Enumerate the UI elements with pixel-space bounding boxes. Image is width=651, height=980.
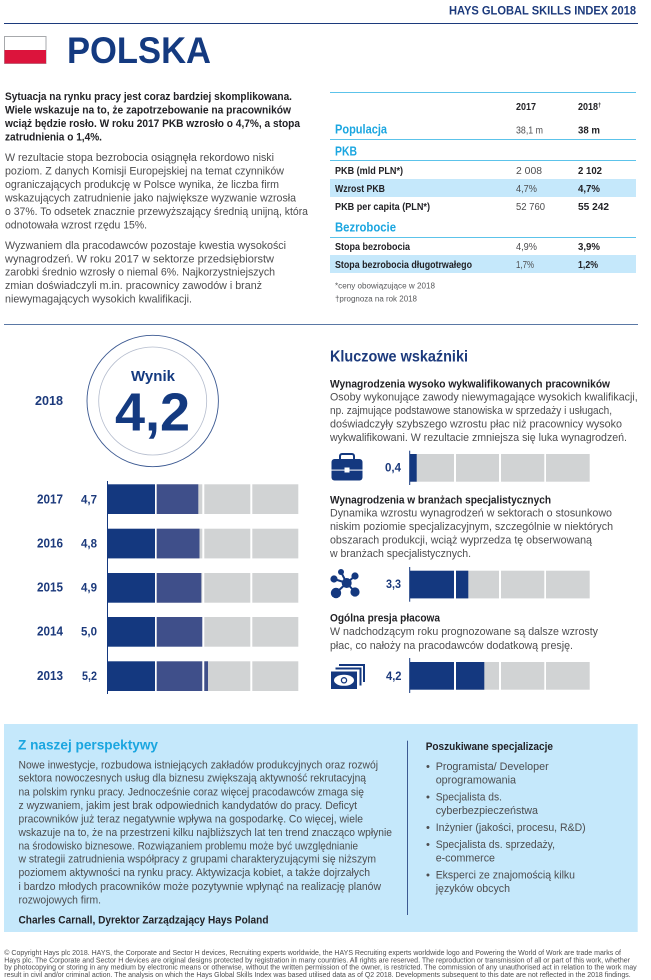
footer: copyright notice (4, 949, 637, 979)
panel: economic data table: 2 102 (578, 166, 602, 177)
panel: economic data table: 38,1 m (516, 126, 543, 136)
panel: economic data table: PKB per capita (PLN*) (335, 202, 430, 213)
header: report title: HAYS GLOBAL SKILLS INDEX 2018 (449, 6, 637, 18)
panel: economic data table: Stopa bezrobocia (335, 242, 410, 253)
panel: our perspective (4, 724, 638, 932)
row 2015: 4,9 (37, 573, 298, 603)
list: in-demand specialisations: Inżynier (jakości, procesu, R&D) (436, 822, 586, 834)
panel: economic data table: 55 242 (578, 202, 609, 213)
panel: economic data table: 2018 (578, 102, 598, 113)
panel: economic data table: 3,9% (578, 242, 600, 253)
panel: economic data table: †prognoza na rok 2018 (335, 295, 418, 304)
text block: intro summary: Wiele wskazuje na to, że zapotrzebowanie na pracowników (5, 104, 291, 116)
score circle: Wynik 4,2: 4,2 (115, 383, 190, 443)
row 2013: 5,2 (37, 661, 298, 691)
indicator: highly skilled wages: Wynagrodzenia wysoko wykwalifikowanych pracowników (330, 378, 610, 390)
panel: economic data table: † (598, 103, 601, 109)
panel: economic data table: 4,7% (578, 184, 600, 195)
list: in-demand specialisations: Eksperci ze znajomością kilku (436, 869, 575, 881)
list: in-demand specialisations: • (426, 839, 430, 851)
text block: intro summary: W rezultacie stopa bezrobocia osiągnęła rekordowo niski (5, 152, 274, 164)
footer: copyright notice: by photocopying or storing in any medium by electronic means or otherwise, without the written permission of the owner, is restricted. The commission of any unauthorised act in relation to the work may (4, 965, 637, 972)
row 2017: 4,7 (37, 484, 298, 514)
bar: score 4,2 (409, 658, 590, 693)
heading: key indicators: Kluczowe wskaźniki (330, 349, 468, 366)
indicator: highly skilled wages: np. zajmujące podstawowe stanowiska w sprzedaży i usługach, (330, 405, 612, 417)
text block: perspective body (18, 759, 392, 906)
bar: score 0,4 (409, 451, 590, 485)
text block: perspective body: i bardzo młodych pracowników może pozytywnie wpłynąć na realizację planów (18, 881, 382, 893)
indicator: wages in specialist industries: niskim poziomie specjalizacyjnym, szczególnie w niektórych (330, 521, 613, 533)
footer: copyright notice: © Copyright Hays plc 2018. HAYS, the Corporate and Sector H devices, Recruiting experts worldwide, the HAYS Recruiting experts worldwide logo and Powering the World of Work are trade marks of (4, 949, 621, 957)
indicator: wages in specialist industries: obszarach produkcji, wciąż wyprzedza tę obserwowaną (330, 534, 593, 546)
panel: economic data table: Wzrost PKB (335, 184, 385, 195)
indicator: highly skilled wages: wykwalifikowani. W rezultacie zmniejsza się luka wynagrodzeń. (329, 432, 627, 444)
row 2015: 4,9: 2015 (37, 581, 63, 595)
footer: copyright notice: result in civil and/or criminal action. The analysis on which the Hays Global Skills Index was based utilised data as of Q2 2018. Developments subsequent to this date are not reflected in the 2018 findings. (4, 972, 631, 979)
text block: intro summary: zarobki średnio wzrosły o niemal 6%. Najkorzystniejszych (5, 267, 275, 279)
panel: economic data table: PKB (335, 144, 357, 158)
list: in-demand specialisations: e-commerce (436, 852, 495, 864)
list: in-demand specialisations: języków obcych (435, 883, 510, 895)
icon: briefcase (332, 454, 362, 480)
indicator: general wage pressure (330, 613, 598, 693)
label: year 2018: 2018 (35, 394, 63, 408)
text block: intro summary: Wyzwaniem dla pracodawców pozostaje kwestia wysokości (5, 240, 286, 252)
text block: perspective body: w strategii zatrudnienia współpracy z grupami charakteryzującymi się niższym (18, 854, 376, 866)
panel: economic data table: 38 m (578, 126, 600, 136)
indicator: highly skilled wages: Osoby wykonujące zawody niewymagające wysokich kwalifikacji, (330, 392, 638, 404)
text block: intro summary: niewymagających wysokich kwalifikacji. (5, 294, 192, 306)
text block: perspective body: pracowników już teraz negatywnie wpływa na gospodarkę. Co więcej, wiele (18, 814, 363, 826)
text block: perspective body: na środowisko biznesowe. Rozwiązaniem problemu może być uwzględnianie (18, 840, 358, 852)
icon: network nodes (330, 569, 360, 598)
text block: intro summary: Sytuacja na rynku pracy jest coraz bardziej skomplikowana. (5, 91, 292, 103)
indicator: wages in specialist industries (329, 494, 613, 602)
text block: intro summary: wynagrodzeń. W roku 2017 w sektorze przedsiębiorstw (4, 253, 275, 265)
text block: perspective body: sektora nowoczesnych usług dla biznesu zwiększają aktywność rekrutacyjną (18, 773, 367, 785)
panel: economic data table: 4,9% (516, 242, 537, 253)
row 2016: 4,8: 2016 (37, 536, 63, 550)
panel: economic data table: PKB (mld PLN*) (335, 166, 403, 177)
row 2013: 5,2: 5,2 (82, 671, 97, 683)
list: in-demand specialisations: • (426, 761, 430, 773)
score label 0,4: 0,4 (385, 463, 402, 475)
list: in-demand specialisations: Specjalista ds. (436, 792, 502, 804)
list: in-demand specialisations: • (426, 792, 430, 804)
footer: copyright notice: Hays plc. The Corporate and Sector H devices are original designs protected by registration in many countries. All rights are reserved. The reproduction or transmission of all or part of this work, whether (4, 957, 631, 964)
title: country name: POLSKA (67, 29, 211, 71)
list: in-demand specialisations: Specjalista ds. sprzedaży, (436, 839, 555, 851)
text block: intro summary: zmian doświadczyli m.in. pracownicy zawodów i branż (5, 280, 262, 292)
row 2014: 5,0: 5,0 (81, 627, 97, 639)
panel: economic data table: 2 008 (516, 166, 542, 177)
list: in-demand specialisations: • (426, 869, 430, 881)
panel: economic data table: Bezrobocie (335, 220, 396, 234)
panel: economic data table: 52 760 (516, 202, 545, 213)
indicator: highly skilled wages (329, 378, 638, 485)
panel: economic data table: 2017 (516, 102, 536, 113)
row 2016: 4,8: 4,8 (81, 538, 98, 550)
indicator: general wage pressure: Ogólna presja płacowa (330, 613, 441, 625)
panel: economic data table (330, 92, 636, 304)
score label 4,2: 4,2 (386, 671, 402, 683)
text block: intro summary: o 37%. To odsetek znacznie przewyższający średnią unijną, która (5, 206, 309, 218)
indicator: general wage pressure: W nadchodzącym roku prognozowane są dalsze wzrosty (330, 626, 598, 638)
text block: perspective body: na polskim rynku pracy. Jednocześnie coraz więcej pracodawców zmaga się (18, 786, 364, 798)
panel: economic data table: 1,2% (578, 260, 598, 271)
text block: perspective body: poziomem aktywności na rynku pracy. Aktywizacja kobiet, a także dojrzałych (18, 867, 370, 879)
indicator: wages in specialist industries: Dynamika wzrostu wynagrodzeń w sektorach o stosunkowo (330, 508, 612, 520)
list: in-demand specialisations: cyberbezpieczeństwa (436, 805, 539, 817)
text block: intro summary (4, 91, 309, 306)
panel: economic data table: *ceny obowiązujące w 2018 (335, 282, 436, 291)
text block: perspective body: Nowe inwestycje, rozbudowa istniejących zakładów produkcyjnych oraz rozwój (18, 759, 378, 771)
score label 3,3: 3,3 (386, 579, 401, 591)
text block: intro summary: zatrudnienia o 1,4%. (5, 132, 102, 144)
text block: intro summary: odnotowała wzrost rzędu 15%. (5, 220, 147, 232)
heading: our perspective: Z naszej perspektywy (18, 736, 158, 752)
signature: Charles Carnall, Dyrektor Zarządzający Hays Poland (18, 914, 269, 926)
panel: economic data table: 1,7% (516, 260, 534, 271)
row 2017: 4,7: 4,7 (81, 494, 97, 506)
bar: score 3,3 (409, 567, 590, 602)
indicator: wages in specialist industries: Wynagrodzenia w branżach specjalistycznych (330, 494, 551, 506)
text block: intro summary: poziom. Z danych Komisji Europejskiej na temat czynników (5, 166, 285, 178)
panel: economic data table: Stopa bezrobocia długotrwałego (335, 260, 472, 271)
text block: perspective body: z wyzwaniem, jakim jest brak odpowiednich kandydatów do pracy. Deficyt (18, 800, 358, 812)
list: in-demand specialisations: Poszukiwane specjalizacje (426, 741, 553, 753)
panel: economic data table: Populacja (335, 122, 388, 136)
icon: banknotes (331, 665, 364, 689)
text block: intro summary: wciąż będzie rosło. W roku 2017 PKB wzrosło o 4,7%, a stopa (4, 118, 301, 130)
score circle: Wynik 4,2 (87, 335, 218, 467)
row 2013: 5,2: 2013 (37, 669, 63, 683)
indicator: highly skilled wages: doświadczyły szybszego wzrostu płac niż pracownicy wysoko (330, 418, 622, 430)
text block: intro summary: wskazujących zatrudnienie jako największe wyzwanie wzrosła (4, 192, 297, 204)
icon: Polish flag (4, 36, 46, 64)
score circle: Wynik 4,2: Wynik (131, 368, 176, 385)
row 2014: 5,0: 2014 (37, 625, 63, 639)
list: in-demand specialisations: Programista/ Developer (436, 761, 549, 773)
text block: perspective body: rozwojowych firm. (18, 894, 101, 906)
indicator: wages in specialist industries: w branżach specjalistycznych. (329, 548, 471, 560)
panel: economic data table: 4,7% (516, 184, 537, 195)
row 2015: 4,9: 4,9 (81, 583, 97, 595)
list: in-demand specialisations: oprogramowania (436, 775, 517, 787)
indicator: general wage pressure: płac, co nałoży na pracodawców dodatkową presję. (330, 640, 573, 652)
bar chart: historic scores 2013–2017 (37, 481, 298, 694)
row 2016: 4,8 (37, 529, 298, 558)
text block: perspective body: wskazuje na to, że na przestrzeni kilku najbliższych lat ten trend znacząco wpłynie (18, 827, 392, 839)
list: in-demand specialisations (426, 741, 586, 895)
row 2014: 5,0 (37, 617, 298, 647)
row 2017: 4,7: 2017 (37, 492, 63, 506)
list: in-demand specialisations: • (426, 822, 430, 834)
text block: intro summary: ograniczających produkcję w Polsce wynika, że liczba firm (5, 179, 279, 191)
